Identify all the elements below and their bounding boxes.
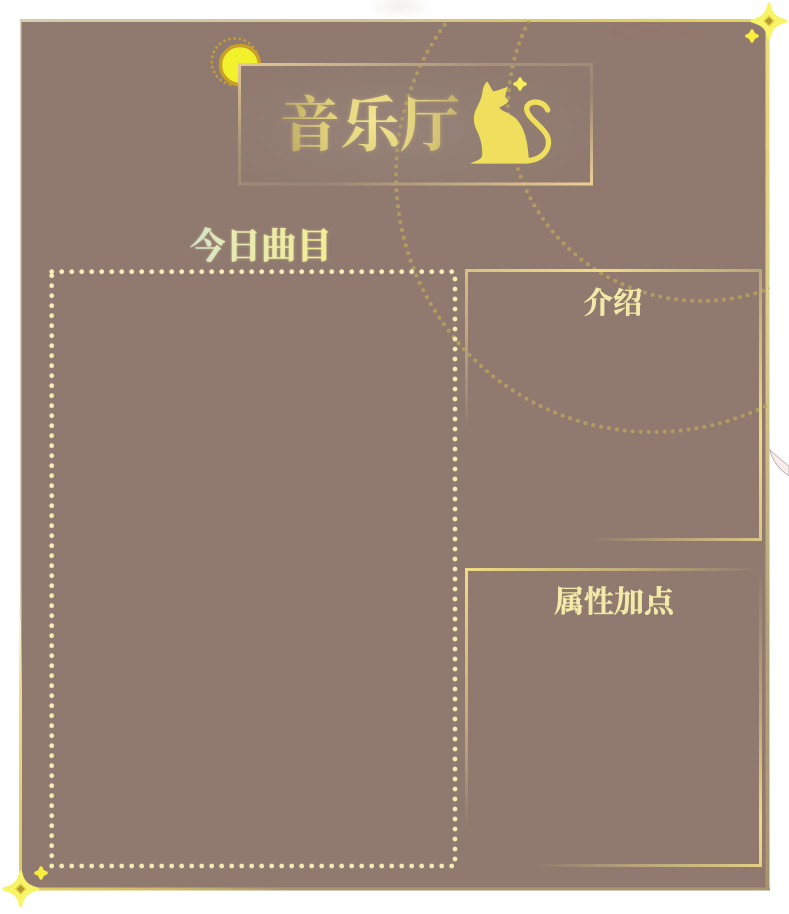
- panel border: right edge: [766, 20, 770, 890]
- title frame: [240, 64, 592, 184]
- title frame background: [240, 64, 592, 184]
- title text: 音乐厅: [280, 93, 460, 159]
- heading: today's tracks: 今日曲目: [190, 226, 332, 266]
- icon: small sparkle by cat: [515, 79, 525, 89]
- panel border: left hairline: [20, 20, 22, 620]
- panel border: left edge: [19, 590, 22, 890]
- icon: top-right small sparkle: [747, 31, 757, 41]
- heading: introduction: 介绍: [583, 287, 643, 320]
- heading: attribute points: 属性加点: [554, 586, 676, 619]
- dotted concentric arcs: [396, 0, 789, 432]
- sun ornament: [212, 38, 260, 85]
- panel border: top edge: [20, 19, 770, 22]
- icon: cat silhouette: [470, 82, 548, 164]
- panel: tracklist dotted frame: [52, 272, 455, 866]
- heading: today's tracks: 今日曲目: [190, 226, 332, 266]
- icon: top-right sparkle: [752, 4, 786, 38]
- title text: 音乐厅: [280, 93, 460, 159]
- icon: bottom-left small sparkle: [36, 868, 46, 878]
- panel border: bottom edge: [20, 888, 770, 890]
- icon: bottom-left sparkle: [4, 872, 38, 906]
- background smudge outside the panel: [366, 0, 434, 20]
- decorative feather fragment: [770, 450, 789, 476]
